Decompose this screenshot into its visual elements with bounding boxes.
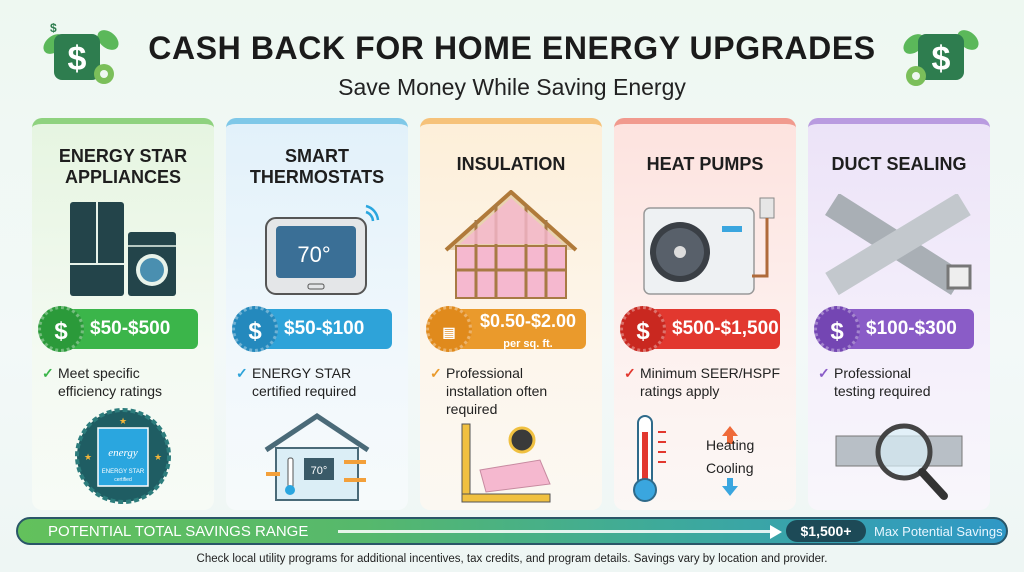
heading: INSULATION (457, 154, 565, 174)
panel: duct sealing (808, 118, 990, 510)
heading: DUCT SEALING (832, 154, 966, 174)
icon: thermometer heating cooling: Heating (706, 437, 754, 453)
badge: $100-$300: $100-$300 (866, 318, 957, 339)
heading: THERMOSTATS (250, 167, 384, 187)
text: requirement: Minimum SEER/HSPF ratings apply (640, 365, 780, 399)
icon: energy star seal: certified (114, 477, 132, 483)
badge: $100-$300: $ (830, 318, 844, 345)
badge: $50-$100 (240, 309, 392, 349)
panel: duct sealing: ✓ (818, 365, 830, 381)
badge: $50-$500: $50-$500 (90, 318, 170, 339)
icon: energy star seal (75, 408, 171, 504)
icon: smart house (264, 413, 370, 501)
footnote: Check local utility programs for additional incentives, tax credits, and program details. Savings vary by location and provider. (197, 553, 827, 565)
icon: smart house: 70° (311, 465, 327, 477)
arrow (338, 530, 772, 533)
subtitle: Save Money While Saving Energy (338, 74, 686, 100)
text: requirement: Meet specific efficiency ratings (58, 365, 162, 399)
badge: $0.50-$2.00 per sq ft: per sq. ft. (503, 338, 553, 350)
bar label: POTENTIAL TOTAL SAVINGS RANGE (48, 523, 308, 540)
text: requirement: Professional installation often required (446, 365, 547, 417)
badge: $500-$1,500 (628, 309, 780, 349)
icon: money leaf right: $ (932, 40, 951, 78)
heading (59, 146, 187, 187)
text: requirement: ENERGY STAR certified required (252, 365, 356, 399)
icon: house with insulation (444, 190, 578, 299)
max value pill (786, 520, 866, 542)
icon: money leaf right (903, 30, 978, 86)
panel: energy star appliances (32, 118, 214, 510)
badge: $500-$1,500: $ (636, 318, 650, 345)
icon: money leaf left (43, 22, 118, 84)
badge: $500-$1,500: $500-$1,500 (672, 318, 779, 339)
text: requirement: Professional testing required (834, 365, 931, 399)
icon: thermostat: 70° (297, 242, 331, 267)
icon: thermostat (265, 204, 380, 295)
icon: fridge and washer (70, 202, 176, 296)
icon: heat pump unit (643, 198, 774, 295)
badge: $100-$300 (822, 309, 974, 349)
icon: ducts (825, 194, 972, 295)
icon: energy star seal: ★ (119, 416, 127, 426)
badge: $50-$500 (46, 309, 198, 349)
badge: $0.50-$2.00 per sq ft: $0.50-$2.00 (480, 311, 576, 331)
icon: ruler and tape (462, 424, 551, 502)
icon: thermometer heating cooling (633, 415, 754, 502)
heading: SMART (285, 146, 349, 166)
icon: energy star seal: ENERGY STAR (102, 469, 145, 475)
icon: energy star seal: ★ (154, 452, 162, 462)
badge: $0.50-$2.00 per sq ft (434, 309, 586, 349)
badge: $50-$500: $ (54, 318, 68, 345)
badge: $50-$100: $ (248, 318, 262, 345)
heading (250, 146, 384, 187)
panel: insulation: ✓ (430, 365, 442, 381)
panel: smart thermostats: ✓ (236, 365, 248, 381)
icon: energy star seal: energy (108, 447, 138, 459)
title: CASH BACK FOR HOME ENERGY UPGRADES (148, 30, 876, 66)
heading: HEAT PUMPS (647, 154, 763, 174)
panel: energy star appliances: ✓ (42, 365, 54, 381)
icon: magnifier on pipe (836, 424, 962, 500)
badge: $50-$100: $50-$100 (284, 318, 364, 339)
panel: heat pumps: ✓ (624, 365, 636, 381)
icon: thermometer heating cooling: Cooling (706, 460, 753, 476)
badge: $0.50-$2.00 per sq ft: ▤ (442, 324, 456, 340)
heading: APPLIANCES (65, 167, 181, 187)
icon: energy star seal: ★ (84, 452, 92, 462)
icon: money leaf left: $ (68, 40, 87, 78)
panel: heat pumps (614, 118, 796, 510)
heading: ENERGY STAR (59, 146, 187, 166)
panel: smart thermostats (226, 118, 408, 510)
panel: insulation (420, 118, 602, 510)
savings range bar (16, 517, 1008, 545)
max value pill: $1,500+ (800, 523, 852, 539)
max label: Max Potential Savings (874, 524, 1003, 539)
